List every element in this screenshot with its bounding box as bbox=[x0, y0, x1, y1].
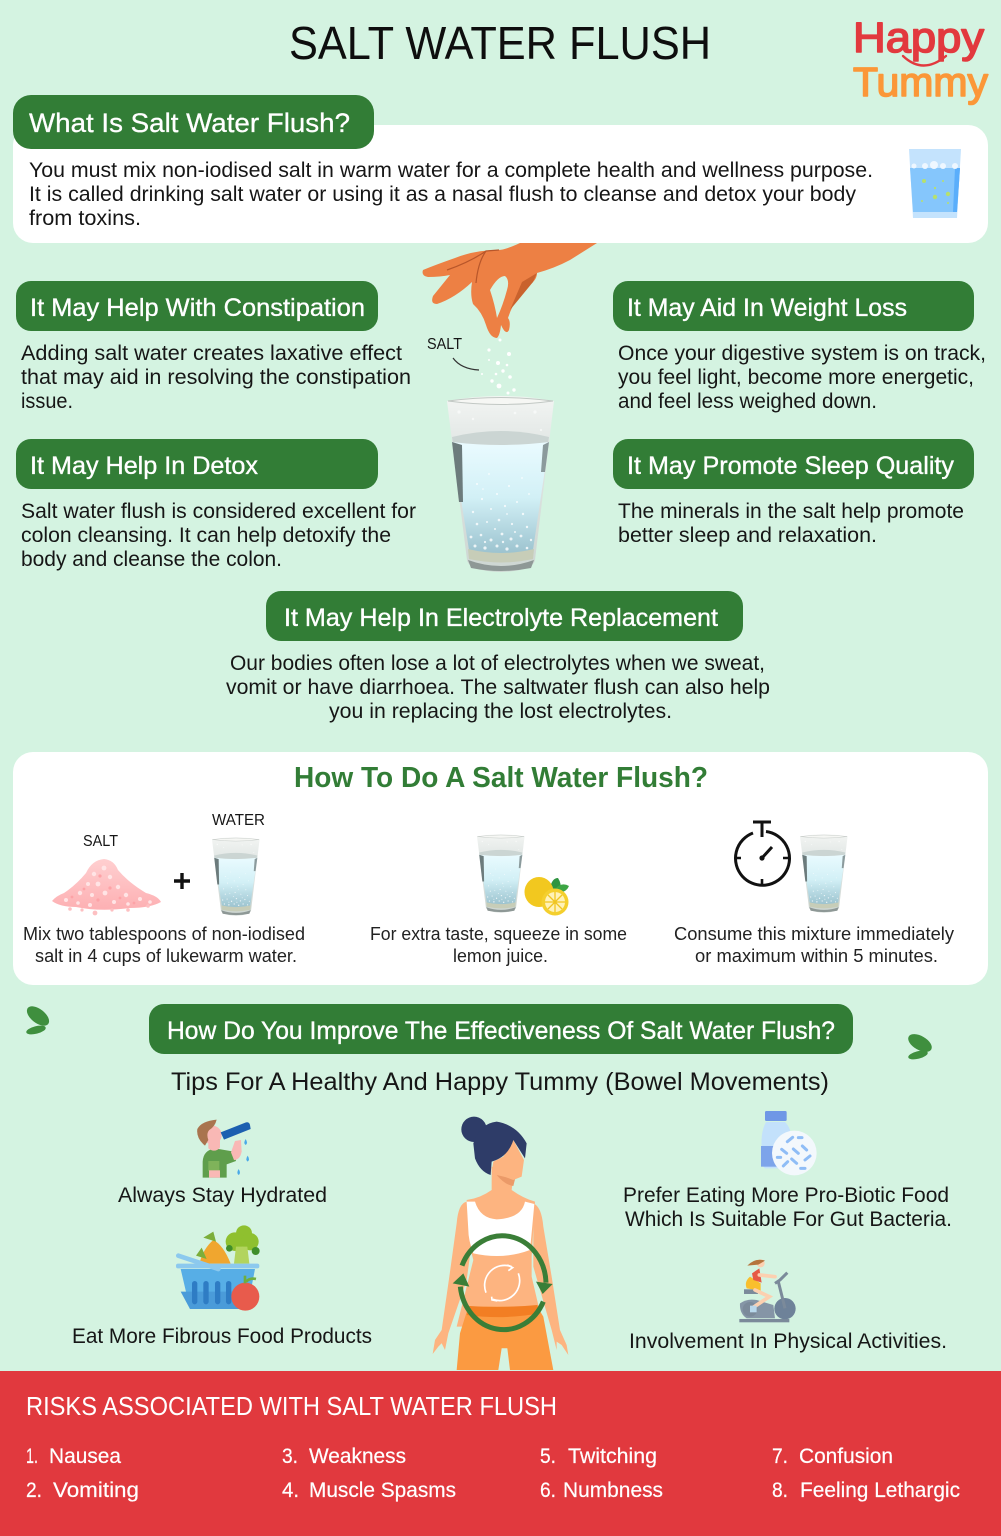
benefit: detox: colon cleansing. It can help detoxify the bbox=[21, 524, 391, 547]
icon: blue water glass bbox=[909, 149, 961, 218]
benefit: weight loss bbox=[613, 281, 986, 413]
heading: what is salt water flush bbox=[13, 95, 374, 149]
step 1: salt plus water: WATER bbox=[212, 812, 265, 829]
panel: risks bbox=[0, 1371, 1001, 1536]
icon: right leaves bbox=[905, 1030, 935, 1061]
label: salt with arrow bbox=[427, 336, 479, 370]
risk list: Feeling Lethargic bbox=[800, 1478, 960, 1502]
benefit: sleep quality: The minerals in the salt help promote bbox=[618, 500, 964, 523]
text: definition: from toxins. bbox=[29, 207, 141, 230]
text: definition: You must mix non-iodised salt in warm water for a complete health and wellness purpose. bbox=[29, 159, 873, 182]
text: definition: It is called drinking salt water or using it as a nasal flush to cleanse and detox your body bbox=[29, 183, 856, 206]
benefit: constipation: It May Help With Constipation bbox=[30, 294, 365, 322]
step 1: salt plus water: Mix two tablespoons of non-iodised bbox=[23, 924, 305, 944]
heading: how to: How To Do A Salt Water Flush? bbox=[294, 762, 708, 794]
white inner arrows bbox=[485, 1265, 520, 1301]
risk list: 4. bbox=[282, 1478, 299, 1502]
benefit: detox: It May Help In Detox bbox=[30, 452, 258, 480]
risk list: 8. bbox=[772, 1478, 788, 1502]
tip: physical activity bbox=[629, 1259, 947, 1353]
benefit: electrolyte replacement: you in replacing the lost electrolytes. bbox=[329, 700, 672, 723]
heading: risks: RISKS ASSOCIATED WITH SALT WATER FLUSH bbox=[26, 1391, 557, 1421]
step 2: lemon juice: For extra taste, squeeze in some bbox=[370, 924, 627, 944]
risk list: Muscle Spasms bbox=[309, 1478, 456, 1502]
step 1: salt plus water bbox=[23, 812, 305, 966]
step 1: salt plus water: salt in 4 cups of lukewarm water. bbox=[35, 946, 297, 966]
subheading: tips: Tips For A Healthy And Happy Tummy (Bowel Movements) bbox=[171, 1068, 829, 1096]
tip: stay hydrated bbox=[118, 1120, 327, 1207]
benefit: constipation: Adding salt water creates laxative effect bbox=[21, 342, 402, 365]
label: salt with arrow: SALT bbox=[427, 336, 462, 353]
step 2: lemon juice bbox=[370, 834, 627, 966]
benefit: detox bbox=[16, 439, 416, 571]
risk list: 7. bbox=[772, 1444, 788, 1468]
benefit: detox: Salt water flush is considered excellent for bbox=[21, 500, 416, 523]
step 1: salt plus water: SALT bbox=[83, 833, 118, 850]
benefit: weight loss: and feel less weighed down. bbox=[618, 390, 877, 413]
title: SALT WATER FLUSH bbox=[289, 17, 711, 69]
risk list: Confusion bbox=[799, 1444, 893, 1468]
illustration: woman with digestive arrows bbox=[433, 1117, 568, 1370]
risk list: Weakness bbox=[309, 1444, 406, 1468]
benefit: constipation bbox=[16, 281, 411, 413]
step 3: timer and glass: Consume this mixture immediately bbox=[674, 924, 954, 944]
benefit: electrolyte replacement: It May Help In Electrolyte Replacement bbox=[284, 604, 718, 632]
benefit: sleep quality bbox=[613, 439, 974, 547]
benefit: weight loss: you feel light, become more energetic, bbox=[618, 366, 974, 389]
logo: Happy Tummy: Happy bbox=[853, 14, 985, 62]
risk list: Twitching bbox=[568, 1444, 657, 1468]
risk list: Vomiting bbox=[53, 1478, 139, 1502]
benefit: sleep quality: better sleep and relaxation. bbox=[618, 524, 877, 547]
heading: improve effectiveness bbox=[149, 1004, 853, 1054]
tip: fibrous food: Eat More Fibrous Food Products bbox=[72, 1324, 372, 1348]
green digestive arrows bbox=[453, 1236, 553, 1330]
benefit: electrolyte replacement: vomit or have diarrhoea. The saltwater flush can also help bbox=[226, 676, 770, 699]
logo: Happy Tummy: Tummy bbox=[853, 59, 988, 105]
risk list: Nausea bbox=[49, 1444, 121, 1468]
benefit: weight loss: Once your digestive system is on track, bbox=[618, 342, 986, 365]
tip: physical activity: Involvement In Physical Activities. bbox=[629, 1329, 947, 1353]
benefit: electrolyte replacement bbox=[226, 591, 770, 723]
benefit: weight loss: It May Aid In Weight Loss bbox=[627, 294, 907, 322]
illustration: large glass of salt water bbox=[447, 396, 554, 572]
risk list: 3. bbox=[282, 1444, 298, 1468]
tip: probiotic food: Prefer Eating More Pro-Biotic Food bbox=[623, 1183, 949, 1207]
risk list: 6. bbox=[540, 1478, 556, 1502]
benefit: electrolyte replacement: Our bodies often lose a lot of electrolytes when we sweat, bbox=[230, 652, 765, 675]
benefit: constipation: issue. bbox=[21, 390, 73, 413]
tip: probiotic food: Which Is Suitable For Gut Bacteria. bbox=[625, 1207, 952, 1231]
risk list: 1. bbox=[26, 1444, 38, 1468]
benefit: constipation: that may aid in resolving the constipation bbox=[21, 366, 411, 389]
step 3: timer and glass bbox=[674, 822, 954, 966]
panel: how to do a salt water flush bbox=[13, 752, 988, 985]
risk list bbox=[26, 1444, 960, 1502]
tip: stay hydrated: Always Stay Hydrated bbox=[118, 1183, 327, 1207]
heading: improve effectiveness: How Do You Improve The Effectiveness Of Salt Water Flush? bbox=[167, 1017, 835, 1045]
benefit: detox: body and cleanse the colon. bbox=[21, 548, 282, 571]
risk list: 2. bbox=[26, 1478, 42, 1502]
risk list: 5. bbox=[540, 1444, 556, 1468]
logo: Happy Tummy bbox=[853, 14, 988, 105]
step 2: lemon juice: lemon juice. bbox=[453, 946, 548, 966]
panel: what is salt water flush bbox=[13, 95, 988, 243]
text: definition bbox=[29, 159, 873, 230]
step 3: timer and glass: or maximum within 5 minutes. bbox=[695, 946, 938, 966]
woman body bbox=[433, 1117, 568, 1370]
risk list: Numbness bbox=[563, 1478, 663, 1502]
benefit: sleep quality: It May Promote Sleep Quality bbox=[627, 452, 954, 480]
tip: probiotic food bbox=[623, 1111, 952, 1231]
heading: what is salt water flush: What Is Salt Water Flush? bbox=[29, 108, 350, 138]
illustration: hand sprinkling salt bbox=[423, 243, 597, 394]
tip: fibrous food bbox=[72, 1225, 372, 1348]
icon: left leaves bbox=[23, 1002, 53, 1036]
